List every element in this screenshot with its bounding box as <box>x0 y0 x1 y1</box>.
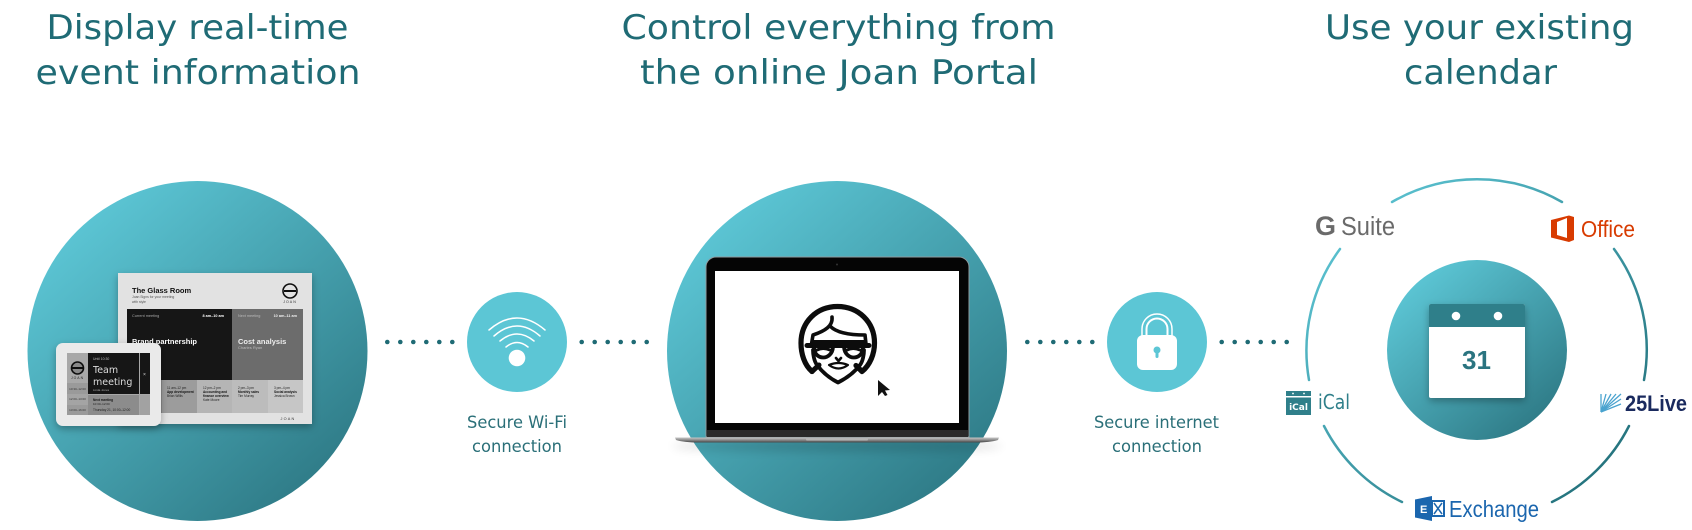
large room display: Brian Willis <box>167 394 183 398</box>
panel: calendar integrations <box>1286 179 1687 522</box>
large room display: JOAN <box>281 417 295 421</box>
large room display: Social analysis <box>274 390 297 394</box>
logo: Office <box>1551 216 1635 242</box>
icon: Joan face logo <box>801 306 874 382</box>
icon: calendar page <box>1429 304 1525 398</box>
logo: iCal <box>1286 390 1350 415</box>
large room display: 11 am–12 pm <box>167 386 187 390</box>
label: secure wi-fi connection <box>467 413 567 456</box>
teal circle: laptop background <box>667 181 1007 521</box>
large room display: Tim Murray <box>238 394 254 398</box>
large room display: 12 pm–2 pm <box>203 386 221 390</box>
title: use your existing calendar: Use your existing <box>1325 8 1634 47</box>
label: secure internet connection: connection <box>1112 437 1202 456</box>
logo: iCal: iCal <box>1318 390 1350 414</box>
large room display: The Glass Room <box>132 286 192 295</box>
small tablet device: Until 10:30 <box>93 357 109 361</box>
title: control everything from the online Joan Portal <box>622 8 1056 92</box>
large room display: Accounting and <box>203 390 227 394</box>
title: display real-time event information <box>36 8 360 92</box>
icon: wi-fi <box>467 292 567 392</box>
large room display: 3 pm–4 pm <box>274 386 290 390</box>
small tablet device: meeting <box>93 377 132 388</box>
logo: 25Live: 25Live <box>1625 391 1687 416</box>
ring arcs <box>1306 179 1647 502</box>
small tablet device: 12:00–13:00 <box>69 397 86 401</box>
small tablet device: JOAN <box>71 376 84 380</box>
small tablet device: × <box>143 372 146 378</box>
dotted connector: display to wifi <box>385 340 455 344</box>
large room display <box>118 273 312 424</box>
logo: Exchange <box>1415 496 1539 522</box>
dotted connector: portal to lock <box>1025 340 1095 344</box>
icon: padlock <box>1107 292 1207 392</box>
logo: G Suite <box>1315 211 1395 241</box>
logo: G Suite: Suite <box>1341 213 1395 241</box>
large room display: Next meeting <box>238 314 260 318</box>
large room display: with style <box>132 300 146 304</box>
laptop shadow <box>672 441 1002 451</box>
large room display: Charles Ryan <box>238 345 262 350</box>
small tablet device: Team <box>92 365 118 376</box>
label: secure internet connection <box>1094 413 1220 456</box>
title: display real-time event information: Display real-time <box>46 8 348 47</box>
large room display: finance overview <box>203 394 229 398</box>
logo: Exchange: Exchange <box>1449 496 1539 522</box>
title: display real-time event information: event information <box>36 53 360 92</box>
logo: iCal: iCal <box>1289 403 1308 413</box>
logo: 25Live <box>1601 391 1687 416</box>
large room display: Kate Moore <box>203 398 220 402</box>
dotted connector: lock to calendars <box>1219 340 1289 344</box>
dotted connector: wifi to portal <box>579 340 649 344</box>
icon: mouse cursor <box>878 380 890 396</box>
panel: Joan Portal laptop <box>667 181 1007 521</box>
small tablet device: 10:30–12:00 <box>69 387 86 391</box>
large room display: Cost analysis <box>238 337 286 346</box>
logo: Office: Office <box>1581 216 1635 242</box>
small tablet device: Next meeting <box>93 398 113 402</box>
large room display: Monthly sales <box>238 390 259 394</box>
teal circle: calendar background <box>1387 260 1567 440</box>
icon: calendar page: 31 <box>1462 345 1491 375</box>
large room display: JOAN <box>283 300 297 304</box>
logo: G Suite: G <box>1315 211 1336 241</box>
title: control everything from the online Joan Portal: the online Joan Portal <box>640 53 1038 92</box>
small tablet device: Thursday 21, 10:00–12:00 <box>93 408 130 412</box>
large room display: App development <box>167 390 195 394</box>
small tablet device: 10:30–12:00 <box>93 402 110 406</box>
large room display: Joan Signs for your meeting <box>132 295 174 299</box>
teal circle: devices background <box>28 181 368 521</box>
panel: display devices <box>28 181 368 521</box>
large room display: 8 am–10 am <box>202 314 225 318</box>
large room display: Brand partnership <box>132 337 197 346</box>
logo: Exchange: E <box>1420 504 1427 516</box>
large room display: Current meeting <box>132 314 159 318</box>
title: use your existing calendar <box>1325 8 1634 92</box>
label: secure internet connection: Secure internet <box>1094 413 1220 432</box>
large room display: 2 pm–3 pm <box>238 386 254 390</box>
large room display: 10 am–11 am <box>274 314 298 318</box>
small tablet device: Linda Jones <box>93 388 110 392</box>
small tablet device <box>56 343 161 426</box>
laptop <box>675 257 999 442</box>
title: use your existing calendar: calendar <box>1404 53 1557 92</box>
label: secure wi-fi connection: Secure Wi-Fi <box>467 413 567 432</box>
label: secure wi-fi connection: connection <box>472 437 562 456</box>
title: control everything from the online Joan Portal: Control everything from <box>622 8 1056 47</box>
large room display: Jessica Brown <box>274 394 295 398</box>
small tablet device: 13:00–16:00 <box>69 408 86 412</box>
